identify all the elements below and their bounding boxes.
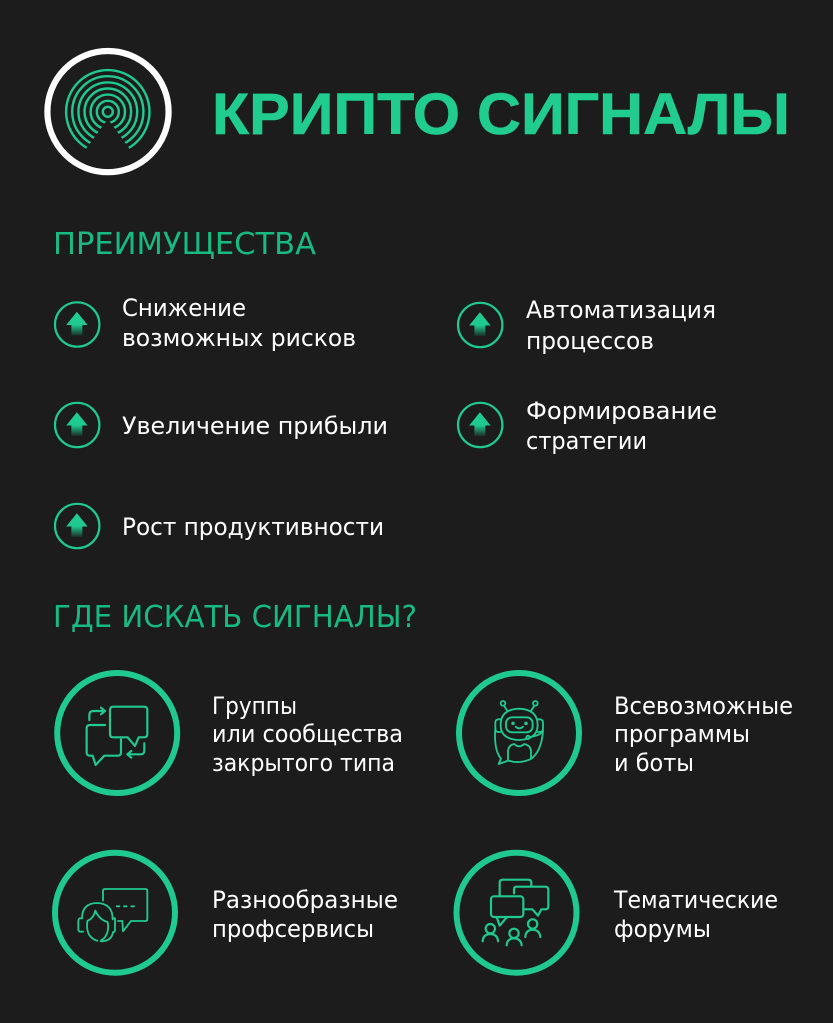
source: professional services: Разнообразные — [212, 886, 398, 914]
advantage: reducing risks: Снижение — [122, 294, 246, 322]
icon: support agent with speech bubble — [78, 889, 147, 941]
advantage: reducing risks — [55, 294, 356, 352]
advantage: automation — [458, 296, 716, 355]
advantage: reducing risks: возможных рисков — [122, 324, 356, 352]
source: programs and bots: программы — [614, 720, 750, 748]
advantage: strategy — [458, 397, 717, 455]
source: programs and bots: Всевозможные — [614, 692, 793, 720]
heading: advantages: ПРЕИМУЩЕСТВА — [53, 227, 316, 262]
source: professional services — [55, 853, 398, 973]
source: groups and communities: закрытого типа — [212, 749, 395, 777]
source: groups and communities — [57, 673, 403, 793]
source: groups and communities: или сообщества — [212, 720, 403, 748]
icon: robot — [495, 701, 543, 764]
heading: where to find signals: ГДЕ ИСКАТЬ СИГНАЛЫ? — [53, 600, 417, 635]
advantage: automation: Автоматизация — [526, 296, 716, 324]
source: programs and bots: и боты — [614, 749, 694, 777]
icon: forum bubbles and people — [483, 880, 548, 945]
source: thematic forums: форумы — [614, 915, 711, 943]
icon: chat bubbles with arrows — [87, 707, 147, 765]
logo: signal icon — [47, 51, 169, 172]
source: thematic forums: Тематические — [613, 886, 778, 914]
source: programs and bots — [459, 673, 793, 793]
source: professional services: профсервисы — [212, 915, 374, 943]
advantage: productivity — [55, 504, 384, 548]
source: groups and communities: Группы — [212, 692, 297, 720]
advantage: profit growth — [55, 403, 388, 447]
title: КРИПТО СИГНАЛЫ — [212, 82, 790, 147]
advantage: profit growth: Увеличение прибыли — [122, 412, 388, 440]
advantage: productivity: Рост продуктивности — [122, 513, 384, 541]
source: thematic forums — [456, 853, 778, 973]
advantage: strategy: стратегии — [526, 427, 647, 455]
advantage: strategy: Формирование — [526, 397, 717, 425]
advantage: automation: процессов — [526, 327, 654, 355]
